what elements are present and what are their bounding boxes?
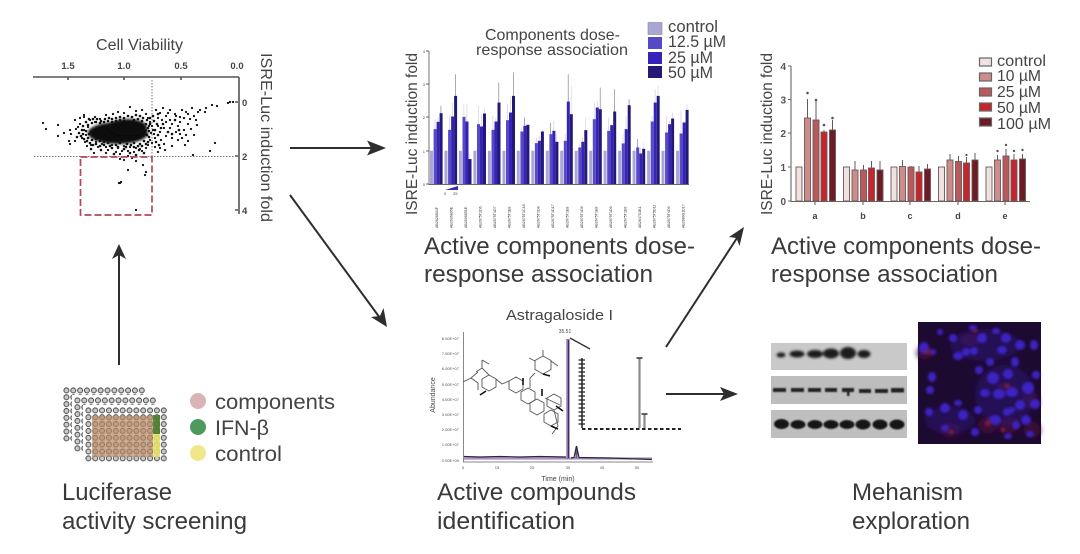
caption: active compounds identification (437, 479, 636, 535)
panel: components dose-response chart (404, 18, 726, 228)
panel: western blot (771, 343, 907, 438)
x axis with ticks: 1.0 (117, 61, 131, 72)
legend markers and labels: control (215, 443, 282, 466)
legend (648, 18, 726, 82)
caption: mechanism exploration: Mehanism (852, 479, 963, 506)
axes: 0 (423, 182, 426, 187)
dose wedge marker: 25 (453, 191, 458, 196)
axes and tick labels: 55 (635, 465, 640, 470)
blot row 3 (771, 410, 907, 438)
legend: 50 µM (668, 64, 713, 82)
caption: active components dose-response (middle): Active components dose- (424, 233, 695, 260)
axes: 4 (423, 49, 426, 54)
axes and tick labels: 5 (462, 465, 465, 470)
axes and tick labels: 5.00E+07 (442, 382, 460, 387)
sample labels: AB2675T1E8 (566, 207, 570, 228)
bars: group e (986, 144, 1026, 201)
sample labels: AB2675T5D11 (652, 205, 656, 228)
arrow: identification to dose response (666, 227, 744, 347)
axes: 0 (780, 197, 786, 208)
legend: control (997, 53, 1046, 70)
axes and tick labels: Time (min) (541, 476, 575, 483)
scatter points (43, 102, 233, 210)
bars: group b (844, 161, 883, 201)
arrow: screening to scatter (112, 244, 126, 365)
panel: cell viability scatter plot (33, 37, 274, 222)
legend (980, 53, 1051, 133)
heading: Astragaloside I: Astragaloside I (506, 307, 613, 324)
axes: 3 (423, 82, 426, 87)
axes and tick labels: 6.00E+07 (442, 366, 460, 371)
x axis with ticks: 0 (242, 98, 247, 109)
y axis title: ISRE-Luc induction fold (404, 53, 421, 215)
axes and tick labels: 1.00E+07 (442, 442, 460, 447)
axes and tick labels: Abundance (430, 377, 437, 413)
x axis with ticks: 0.5 (174, 61, 188, 72)
axes: a (812, 211, 818, 221)
dose wedge marker: 0 (444, 191, 447, 196)
sample labels: AB2626804F (435, 206, 439, 228)
legend: 50 µM (997, 100, 1041, 117)
axes: d (955, 211, 961, 221)
legend: 25 µM (668, 49, 713, 67)
y axis title: ISRE-Luc induction fold (759, 53, 776, 215)
axes and tick labels: 35 (566, 465, 571, 470)
chart title: response association (476, 42, 628, 59)
axes: c (907, 211, 913, 221)
sample labels: AB2675T1E8 (508, 207, 512, 228)
well plates stack (63, 387, 168, 465)
legend: 12.5 µM (668, 33, 726, 51)
x axis with ticks: 4 (242, 206, 248, 217)
leader line to inset (570, 338, 590, 349)
legend: 25 µM (997, 84, 1041, 101)
sample labels: AB2689S1D17 (682, 204, 686, 228)
bars (430, 73, 689, 184)
caption: active components dose-response (right): response association (771, 261, 998, 288)
legend markers and labels: IFN-β (215, 417, 269, 440)
axes and tick labels: 15 (495, 465, 500, 470)
legend: control (668, 18, 718, 36)
sample labels: AB2675T1E6 (624, 207, 628, 228)
legend: 10 µM (997, 68, 1041, 85)
chart title: Components dose- (485, 27, 620, 44)
heading: Cell Viability: Cell Viability (96, 37, 183, 54)
sample labels: AB2675T1D7 (493, 206, 497, 228)
sample labels (435, 204, 686, 228)
caption: active components dose-response (right) (771, 233, 1041, 288)
axes and tick labels: 0.00E+00 (442, 458, 460, 463)
sample labels: AB2675T1D8 (536, 206, 540, 228)
sample labels: AB2675T4D6 (667, 206, 671, 228)
axes: 3 (780, 96, 786, 106)
molecular structure (463, 350, 563, 434)
arrow: scatter to dose response (290, 140, 386, 156)
caption: luciferase activity screening (62, 479, 247, 535)
bars: group c (891, 160, 930, 201)
caption: mechanism exploration (852, 479, 970, 535)
caption: luciferase activity screening: Luciferase (62, 479, 172, 506)
caption: active components dose-response (right): Active components dose- (771, 233, 1041, 260)
axes (423, 49, 689, 187)
axes: 4 (780, 62, 786, 73)
axes and tick labels (430, 332, 653, 483)
panel: active components red bar chart (759, 53, 1051, 221)
panel: fluorescence micrograph (917, 322, 1041, 444)
bars: group d (938, 153, 978, 201)
panel: astragaloside chromatogram (430, 307, 681, 483)
caption: active compounds identification: identification (437, 508, 575, 535)
legend markers and labels: components (215, 391, 335, 414)
dose wedge marker (444, 186, 458, 196)
dashed selection rectangle (80, 157, 152, 215)
chart title (476, 27, 628, 59)
x axis with ticks: 1.5 (61, 61, 75, 72)
sample labels: AB2675T1D17 (551, 204, 555, 228)
axes and tick labels: 25 (530, 465, 535, 470)
axes: e (1002, 211, 1008, 221)
axes and tick labels: 4.00E+07 (442, 397, 460, 402)
axes and tick labels: 7.00E+07 (442, 351, 460, 356)
legend markers and labels (190, 391, 335, 466)
panel: luciferase plate illustration (63, 387, 335, 466)
caption: luciferase activity screening: activity screening (62, 508, 247, 535)
axes (780, 62, 1030, 221)
axes: 1 (423, 149, 426, 154)
sample labels: AB2675T1C18 (522, 204, 526, 228)
caption: active compounds identification: Active compounds (437, 479, 636, 506)
axis title: ISRE-Luc induction fold: ISRE-Luc induction fold (257, 53, 274, 222)
sample labels: AB2675T1D8 (580, 206, 584, 228)
axes: 1 (780, 163, 786, 174)
arrow: identification to mechanism (666, 387, 738, 401)
axes: b (860, 211, 866, 221)
legend: 100 µM (997, 116, 1051, 133)
sample labels: AB2636851E (464, 206, 468, 228)
arrow: scatter to compound identification (290, 195, 387, 327)
axes and tick labels: 45 (600, 465, 605, 470)
threshold dotted lines (34, 80, 238, 156)
axes and tick labels: 2.00E+07 (442, 427, 460, 432)
x axis with ticks: 0.0 (230, 61, 244, 72)
sample labels: AB2636805E (450, 206, 454, 228)
peak value: 35.51 (559, 329, 571, 335)
sample labels: AB2675T1D6 (478, 206, 482, 228)
sample labels: AB2647S1B1 (638, 206, 642, 228)
axes: 2 (423, 115, 426, 120)
axes and tick labels: 8.00E+07 (442, 336, 460, 341)
x axis with ticks (33, 61, 248, 217)
axes: 2 (780, 129, 786, 140)
sample labels: AB2675T1D6 (609, 206, 613, 228)
blot row 1 (771, 343, 907, 370)
caption: mechanism exploration: exploration (852, 508, 970, 535)
blot row 2 (771, 376, 907, 404)
caption: active components dose-response (middle) (424, 233, 695, 288)
chromatogram trace (464, 339, 652, 460)
caption: active components dose-response (middle): response association (424, 261, 653, 288)
sample labels: AB2675T1E8 (594, 207, 598, 228)
x axis with ticks: 2 (242, 152, 247, 163)
bars: group a (796, 92, 836, 201)
inset mass spectrum (578, 358, 681, 429)
axes and tick labels: 3.00E+07 (442, 412, 460, 417)
